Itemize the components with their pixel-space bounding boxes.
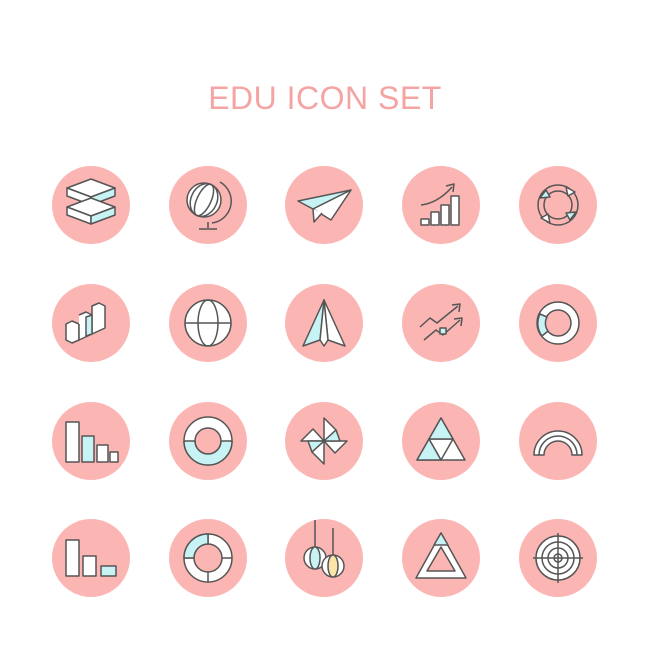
icon: hanging lanterns bbox=[285, 519, 363, 597]
title: EDU ICON SET bbox=[208, 80, 442, 116]
icon: segmented ring bbox=[519, 284, 597, 362]
icon: growth bars bbox=[402, 166, 480, 244]
icon: cylinder bars bbox=[52, 519, 130, 597]
icon: sphere bbox=[169, 284, 247, 362]
icon: target bbox=[519, 519, 597, 597]
icon: double arrows bbox=[402, 284, 480, 362]
icon: segmented donut bbox=[169, 519, 247, 597]
icon: donut bbox=[169, 402, 247, 480]
icon: cycle arrows bbox=[519, 166, 597, 244]
icon: stacked layers bbox=[52, 166, 130, 244]
icon: triangle bbox=[402, 402, 480, 480]
icon: paper plane bbox=[285, 166, 363, 244]
icon: paper plane front bbox=[285, 284, 363, 362]
icon: globe bbox=[169, 166, 247, 244]
icon: pinwheel bbox=[285, 402, 363, 480]
icon: descending bars bbox=[52, 402, 130, 480]
icon: rainbow arc bbox=[519, 402, 597, 480]
icon: 3d bar chart bbox=[52, 284, 130, 362]
icon: triangle loop bbox=[402, 519, 480, 597]
